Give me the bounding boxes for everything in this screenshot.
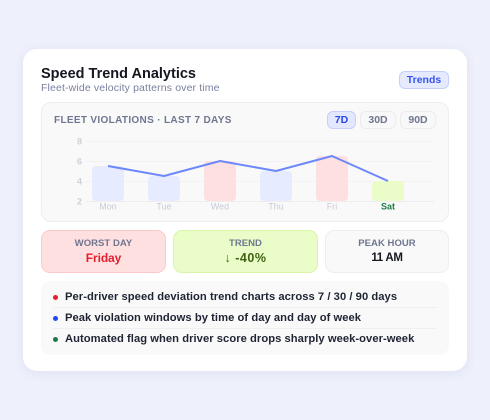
line and bar chart: Wed [211, 202, 229, 212]
stat: peak hour [325, 230, 449, 273]
bullet: green dot [53, 337, 58, 342]
chart heading: FLEET VIOLATIONS · LAST 7 DAYS [54, 115, 232, 126]
line and bar chart: 6 [77, 156, 82, 166]
range button: 90D [400, 111, 436, 129]
range button: 30D: 30D [368, 114, 388, 126]
stat: worst day: WORST DAY [75, 238, 132, 249]
stat: trend: ↓ -40% [225, 251, 266, 265]
line and bar chart: 4 [77, 176, 82, 186]
badge: Trends [399, 71, 449, 89]
list item 2: Peak violation windows by time of day and day of week [65, 312, 361, 324]
list item 3: Automated flag when driver score drops sharply week-over-week [65, 333, 414, 345]
line and bar chart: Tue [156, 202, 172, 212]
line and bar chart: Sat [381, 202, 395, 212]
line and bar chart: Fri [327, 202, 337, 212]
stat: peak hour: 11 AM [371, 252, 403, 264]
panel: feature list [41, 281, 449, 355]
list item 1: Per-driver speed deviation trend charts across 7 / 30 / 90 days [65, 291, 397, 303]
bullet: red dot [53, 295, 58, 300]
bullet: blue dot [53, 316, 58, 321]
range button: 7D [327, 111, 356, 129]
range button: 90D: 90D [408, 114, 428, 126]
stat: worst day [41, 230, 166, 273]
stat: peak hour: PEAK HOUR [358, 238, 416, 249]
stat: trend [173, 230, 318, 273]
stat: trend: TREND [229, 238, 262, 249]
badge: Trends: Trends [407, 74, 441, 86]
subtitle: Fleet-wide velocity patterns over time [41, 82, 220, 94]
line and bar chart: 8 [77, 136, 82, 146]
line and bar chart: Mon [99, 202, 117, 212]
stat: worst day: Friday [86, 251, 121, 265]
range button: 30D [360, 111, 396, 129]
panel: chart [41, 102, 449, 222]
line and bar chart: Thu [268, 202, 284, 212]
title: Speed Trend Analytics [41, 66, 196, 82]
card [23, 49, 467, 371]
line and bar chart: 2 [77, 196, 82, 206]
range button: 7D: 7D [335, 114, 348, 126]
